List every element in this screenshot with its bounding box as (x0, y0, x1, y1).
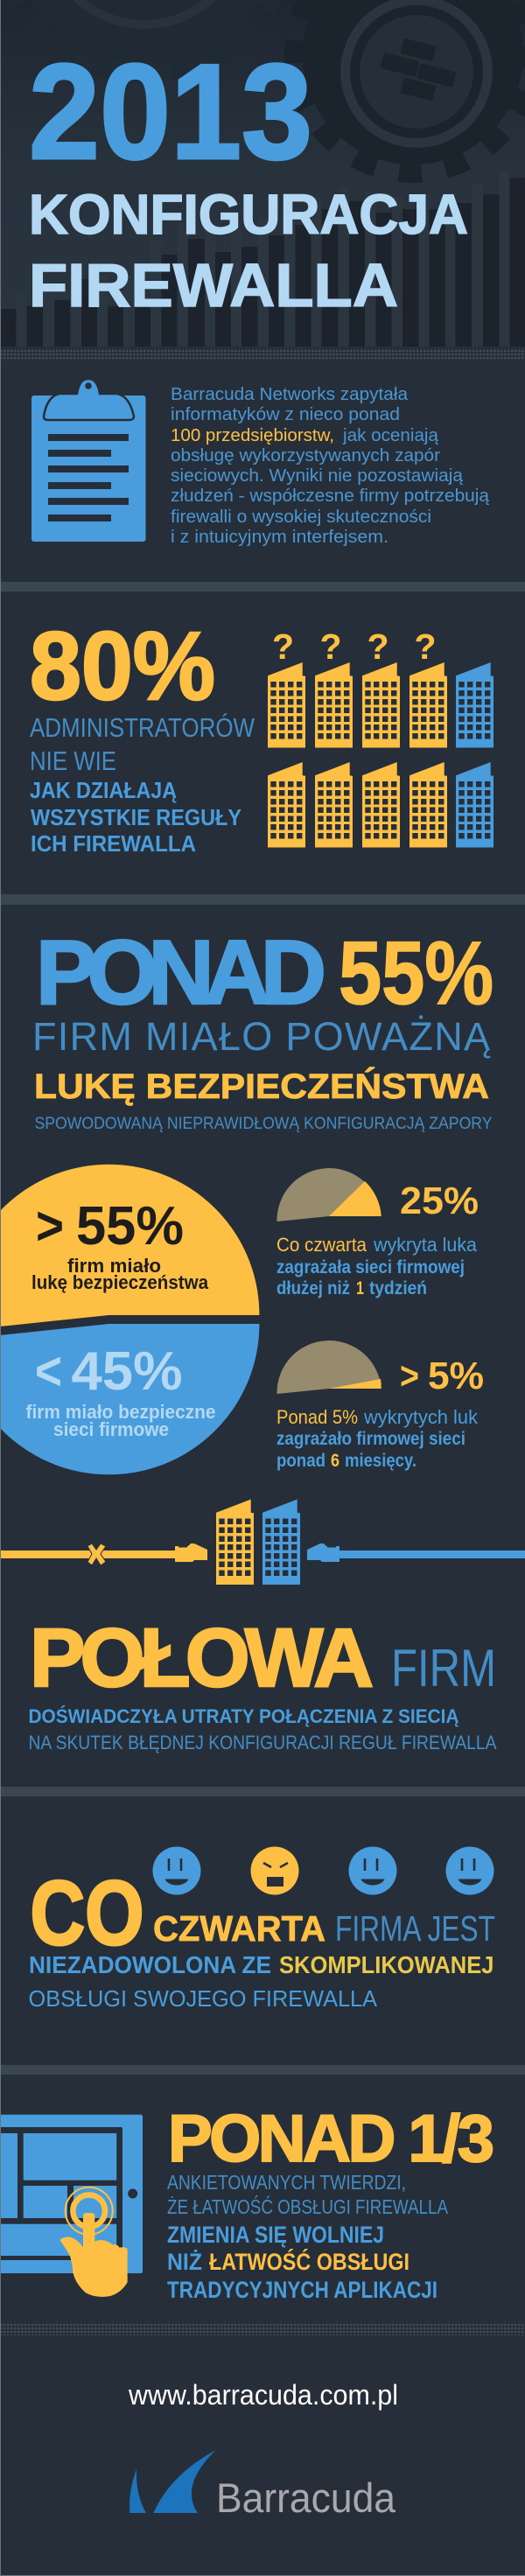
title line: firewalla: FIREWALLA (29, 251, 398, 319)
text: co czwarta luka: wykryta luka (373, 1234, 478, 1256)
text: co czwarta luka: zagrażała sieci firmowej (276, 1257, 465, 1278)
text: ankietowanych (167, 2171, 449, 2218)
text: zmienia się wolniej: TRADYCYJNYCH APLIKACJI (167, 2277, 438, 2303)
slice: 55 percent: lukę bezpieczeństwa (32, 1271, 209, 1293)
text: co czwarta luka: tydzień (369, 1278, 427, 1298)
administrators text: ADMINISTRATORÓW (30, 712, 256, 743)
text: ponad 5 procent luk (276, 1406, 479, 1471)
slice: 45 percent: < (35, 1341, 62, 1402)
intro paragraph: Barracuda Networks zapytała (171, 385, 409, 404)
heading: ponad 55 percent: PONAD (36, 922, 326, 1024)
heading: ponad 55 percent (36, 922, 494, 1024)
heading: ponad 55 percent: 55% (339, 923, 494, 1023)
caption: nieprawidłowa konfiguracja: SPOWODOWANĄ NIEPRAWIDŁOWĄ KONFIGURACJĄ ZAPORY (35, 1115, 493, 1133)
intro paragraph (171, 385, 490, 547)
cable: yellow, broken (0, 1544, 207, 1565)
text: ponad 5 procent luk: zagrażało firmowej sieci (276, 1429, 466, 1449)
logo: barracuda (130, 2450, 396, 2521)
text: ankietowanych: ŻE ŁATWOŚĆ OBSŁUGI FIREWALLA (167, 2194, 449, 2218)
text: ponad 5 procent luk: Ponad 5% (276, 1406, 358, 1428)
text: ponad 5 procent luk: miesięcy. (345, 1451, 416, 1471)
intro paragraph: jak oceniają (342, 426, 439, 445)
text: niezadowolona ze skomplikowanej: SKOMPLIKOWANEJ (279, 1951, 494, 1978)
intro paragraph: 100 przedsiębiorstw, (171, 426, 334, 445)
icon: happy face 2 (348, 1846, 397, 1895)
gauge: 25 percent (276, 1168, 382, 1222)
value: 5 percent (400, 1354, 484, 1397)
intro paragraph: obsługę wykorzystywanych zapór (171, 446, 440, 466)
building pictogram: 8 of 10 yellow (268, 662, 494, 847)
question marks: ? (272, 626, 294, 667)
intro paragraph: i z intuicyjnym interfejsem. (171, 528, 388, 547)
website address: www.barracuda.com.pl (128, 2379, 398, 2411)
text: co czwarta luka: Co czwarta (276, 1234, 368, 1256)
text: ankietowanych: ANKIETOWANYCH TWIERDZI, (167, 2171, 406, 2194)
heading: połowa firm: POŁOWA (30, 1612, 374, 1704)
subheading: lukę bezpieczeństwa: LUKĘ BEZPIECZEŃSTWA (34, 1067, 489, 1106)
title year: 2013 (29, 36, 312, 187)
text: zmienia się wolniej (167, 2222, 438, 2303)
slice: 45 percent: sieci firmowe (53, 1418, 169, 1440)
administrators text: NIE WIE (30, 746, 116, 776)
illustration: broken network cable and buildings (0, 1500, 525, 1585)
administrators text (30, 712, 256, 857)
text: utrata połączenia: DOŚWIADCZYŁA UTRATY POŁĄCZENIA Z SIECIĄ (28, 1705, 459, 1727)
icon: happy face 3 (446, 1846, 494, 1895)
heading: co czwarta firma jest: CO (30, 1863, 144, 1964)
gauge: 5 percent (276, 1340, 382, 1394)
text: ponad 5 procent luk: wykrytych luk (363, 1406, 479, 1428)
text: ponad 5 procent luk: 6 (331, 1451, 340, 1471)
question marks: ? (414, 626, 437, 667)
intro paragraph: złudzeń - współczesne firmy potrzebują (171, 486, 490, 506)
slice: 45 percent: 45% (72, 1341, 182, 1402)
heading: co czwarta firma jest: CZWARTA (153, 1908, 326, 1949)
heading: ponad 1/3: PONAD 1/3 (168, 2102, 494, 2176)
illustration: tablet with touching hand (0, 2115, 143, 2297)
administrators text: WSZYSTKIE REGUŁY (31, 804, 242, 830)
question marks: ? (319, 626, 342, 667)
slice: 45 percent (0, 1324, 259, 1474)
text: zmienia się wolniej: ŁATWOŚĆ OBSŁUGI (209, 2248, 410, 2275)
subheading: firm miało poważną: FIRM MIAŁO POWAŻNĄ (32, 1014, 491, 1059)
cable: blue (307, 1544, 525, 1562)
question marks (272, 626, 437, 667)
slice: 45 percent: firm miało bezpieczne (26, 1401, 215, 1423)
pie chart: 55 vs 45 percent (0, 1165, 259, 1474)
text: zmienia się wolniej: NIŻ (167, 2249, 202, 2275)
logo: barracuda: Barracuda (216, 2474, 396, 2521)
slice: 55 percent: > (36, 1196, 64, 1256)
bar chart motif (0, 172, 525, 346)
text: co czwarta luka: dłużej niż (276, 1278, 350, 1298)
text: co czwarta luka (276, 1234, 478, 1298)
touch rings (66, 2188, 113, 2235)
heading: połowa firm: FIRM (391, 1639, 496, 1698)
hand (60, 2213, 128, 2297)
text: zmienia się wolniej: ZMIENIA SIĘ WOLNIEJ (167, 2222, 384, 2248)
right gear with brick emblem (294, 0, 525, 173)
icon: happy face 1 (152, 1846, 201, 1895)
question marks: ? (367, 626, 389, 667)
intro paragraph: sieciowych. Wyniki nie pozostawiają (171, 466, 464, 486)
icon: angry face (250, 1846, 299, 1895)
value: 5 percent: 5% (428, 1354, 484, 1397)
intro paragraph: informatyków z nieco ponad (171, 405, 400, 424)
left gear (0, 0, 290, 72)
header background: gears and bars (0, 0, 525, 346)
administrators text: ICH FIREWALLA (31, 830, 196, 857)
heading: co czwarta firma jest (30, 1863, 495, 1964)
value: 5 percent: > (400, 1354, 419, 1397)
text: obsługi swojego firewalla: OBSŁUGI SWOJEGO FIREWALLA (28, 1985, 378, 2012)
text: niezadowolona ze skomplikowanej (29, 1951, 494, 1978)
icon: clipboard (32, 379, 145, 542)
text: ponad 5 procent luk: ponad (276, 1451, 326, 1471)
text: co czwarta luka: 1 (356, 1278, 364, 1298)
slice: 55 percent: firm miało (67, 1255, 161, 1277)
slice: 55 percent (0, 1165, 259, 1326)
statistic: 80 percent: 80% (30, 612, 215, 720)
title line: konfiguracja: KONFIGURACJA (29, 183, 468, 246)
slice: 55 percent: 55% (76, 1196, 184, 1256)
value: 25 percent: 25% (400, 1180, 479, 1222)
intro paragraph: firewalli o wysokiej skuteczności (171, 508, 431, 527)
tablet (0, 2115, 143, 2273)
administrators text: JAK DZIAŁAJĄ (30, 777, 177, 803)
text: niezadowolona ze skomplikowanej: NIEZADOWOLONA ZE (29, 1951, 271, 1978)
